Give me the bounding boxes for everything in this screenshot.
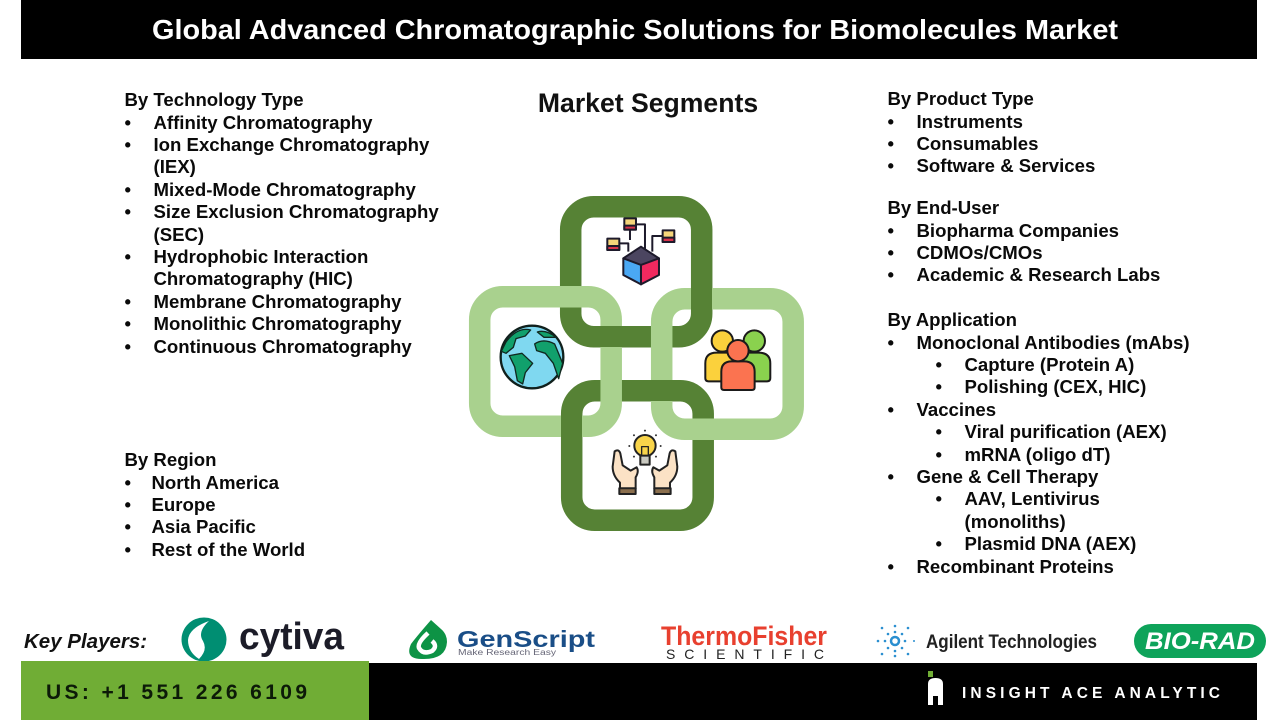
logo: agilent technologies [877, 625, 1097, 657]
panel: by application: • [888, 556, 894, 577]
panel: by product type: Consumables [916, 133, 1038, 154]
panel: by application: Viral purification (AEX) [964, 421, 1167, 442]
title banner [21, 0, 1257, 59]
panel: by technology type: • [124, 112, 131, 133]
panel: by technology type: By Technology Type [124, 89, 304, 110]
panel: by technology type: • [124, 291, 131, 312]
panel: by region: Europe [152, 494, 216, 515]
panel: by region: • [124, 516, 131, 537]
panel: by end-user: CDMOs/CMOs [916, 242, 1043, 263]
panel: by technology type: Monolithic Chromatography [154, 313, 402, 334]
panel: by application: (monoliths) [964, 511, 1066, 532]
panel: by application: Gene & Cell Therapy [916, 466, 1099, 487]
panel: by application: • [888, 332, 894, 353]
footer: black bar [369, 663, 1257, 720]
panel: by application: • [936, 421, 942, 442]
panel: by end-user: • [888, 242, 894, 263]
panel: by region: • [124, 494, 131, 515]
panel: by product type: • [888, 111, 894, 132]
title banner: Global Advanced Chromatographic Solutions for Biomolecules Market [152, 14, 1118, 45]
chain diagram: interlocked rings [480, 207, 793, 520]
panel: by application: Capture (Protein A) [964, 354, 1134, 375]
panel: by application: mRNA (oligo dT) [964, 444, 1110, 465]
logo: genscript: GenScript [457, 626, 595, 652]
panel: by application: By Application [888, 309, 1017, 330]
panel: by end-user: • [888, 220, 894, 241]
panel: by technology type: Chromatography (HIC) [154, 268, 353, 289]
panel: by application: • [936, 354, 942, 375]
footer: phone contact: US: +1 551 226 6109 [46, 681, 307, 704]
panel: by product type: Instruments [916, 111, 1023, 132]
panel: by product type: • [888, 155, 894, 176]
panel: by end-user: • [888, 264, 894, 285]
logo: thermo fisher scientific: ThermoFisher [661, 621, 827, 651]
icon: people group [705, 330, 770, 390]
logo: thermo fisher scientific: SCIENTIFIC [666, 646, 824, 662]
logo: genscript: Make Research Easy [458, 648, 556, 657]
panel: by technology type: Mixed-Mode Chromatography [154, 179, 417, 200]
logo: agilent technologies: Agilent Technologies [926, 632, 1097, 653]
panel: by technology type: Hydrophobic Interaction [154, 246, 368, 267]
logo: thermo fisher scientific [661, 621, 827, 662]
panel: by technology type: • [124, 336, 131, 357]
panel: by product type: Software & Services [916, 155, 1095, 176]
panel: by region: • [124, 472, 131, 493]
panel: by application: Plasmid DNA (AEX) [964, 533, 1136, 554]
brand: insight ace analytic: INSIGHT ACE ANALYTIC [962, 685, 1220, 702]
panel: by technology type: Membrane Chromatography [154, 291, 402, 312]
panel: by region [124, 449, 305, 560]
panel: by technology type: (SEC) [154, 224, 204, 245]
panel: by application: Recombinant Proteins [916, 556, 1114, 577]
panel: by technology type: • [124, 313, 131, 334]
panel: by application: Monoclonal Antibodies (mAbs) [916, 332, 1190, 353]
heading: market segments: Market Segments [538, 88, 758, 118]
icon: hands holding light bulb [613, 430, 677, 494]
logo: bio-rad: BIO-RAD [1145, 628, 1255, 655]
panel: by technology type [124, 89, 439, 357]
icon: globe [501, 326, 563, 388]
panel: by technology type: (IEX) [154, 156, 196, 177]
panel: by region: Rest of the World [152, 539, 305, 560]
panel: by end-user [888, 197, 1160, 285]
logo: genscript [409, 620, 595, 659]
panel: by application: • [888, 466, 894, 487]
panel: by product type: By Product Type [888, 88, 1034, 109]
panel: by technology type: • [124, 134, 131, 155]
panel: by region: By Region [124, 449, 216, 470]
panel: by application: Vaccines [916, 399, 996, 420]
logo: cytiva: cytiva [239, 616, 345, 658]
panel: by technology type: Affinity Chromatography [154, 112, 373, 133]
logo: cytiva [182, 616, 345, 662]
panel: by end-user: By End-User [888, 197, 999, 218]
panel: by application: • [936, 488, 942, 509]
panel: by region: North America [152, 472, 280, 493]
panel: by technology type: • [124, 201, 131, 222]
panel: by technology type: Size Exclusion Chromatography [154, 201, 439, 222]
panel: by end-user: Academic & Research Labs [916, 264, 1160, 285]
brand: insight ace analytic [928, 671, 1220, 705]
panel: by product type [888, 88, 1095, 176]
panel: by application: • [936, 376, 942, 397]
footer: phone contact [21, 661, 369, 720]
panel: by technology type: Continuous Chromatography [154, 336, 412, 357]
panel: by application: AAV, Lentivirus [964, 488, 1100, 509]
panel: by technology type: • [124, 246, 131, 267]
panel: by application [888, 309, 1190, 577]
logo: bio-rad [1134, 624, 1266, 658]
panel: by application: Polishing (CEX, HIC) [964, 376, 1146, 397]
panel: by application: • [936, 533, 942, 554]
panel: by end-user: Biopharma Companies [916, 220, 1119, 241]
icon: data cube [607, 218, 674, 284]
panel: by application: • [888, 399, 894, 420]
panel: by technology type: • [124, 179, 131, 200]
label: key players: Key Players: [24, 630, 147, 653]
panel: by application: • [936, 444, 942, 465]
panel: by region: Asia Pacific [152, 516, 256, 537]
panel: by region: • [124, 539, 131, 560]
panel: by product type: • [888, 133, 894, 154]
panel: by technology type: Ion Exchange Chromatography [154, 134, 430, 155]
